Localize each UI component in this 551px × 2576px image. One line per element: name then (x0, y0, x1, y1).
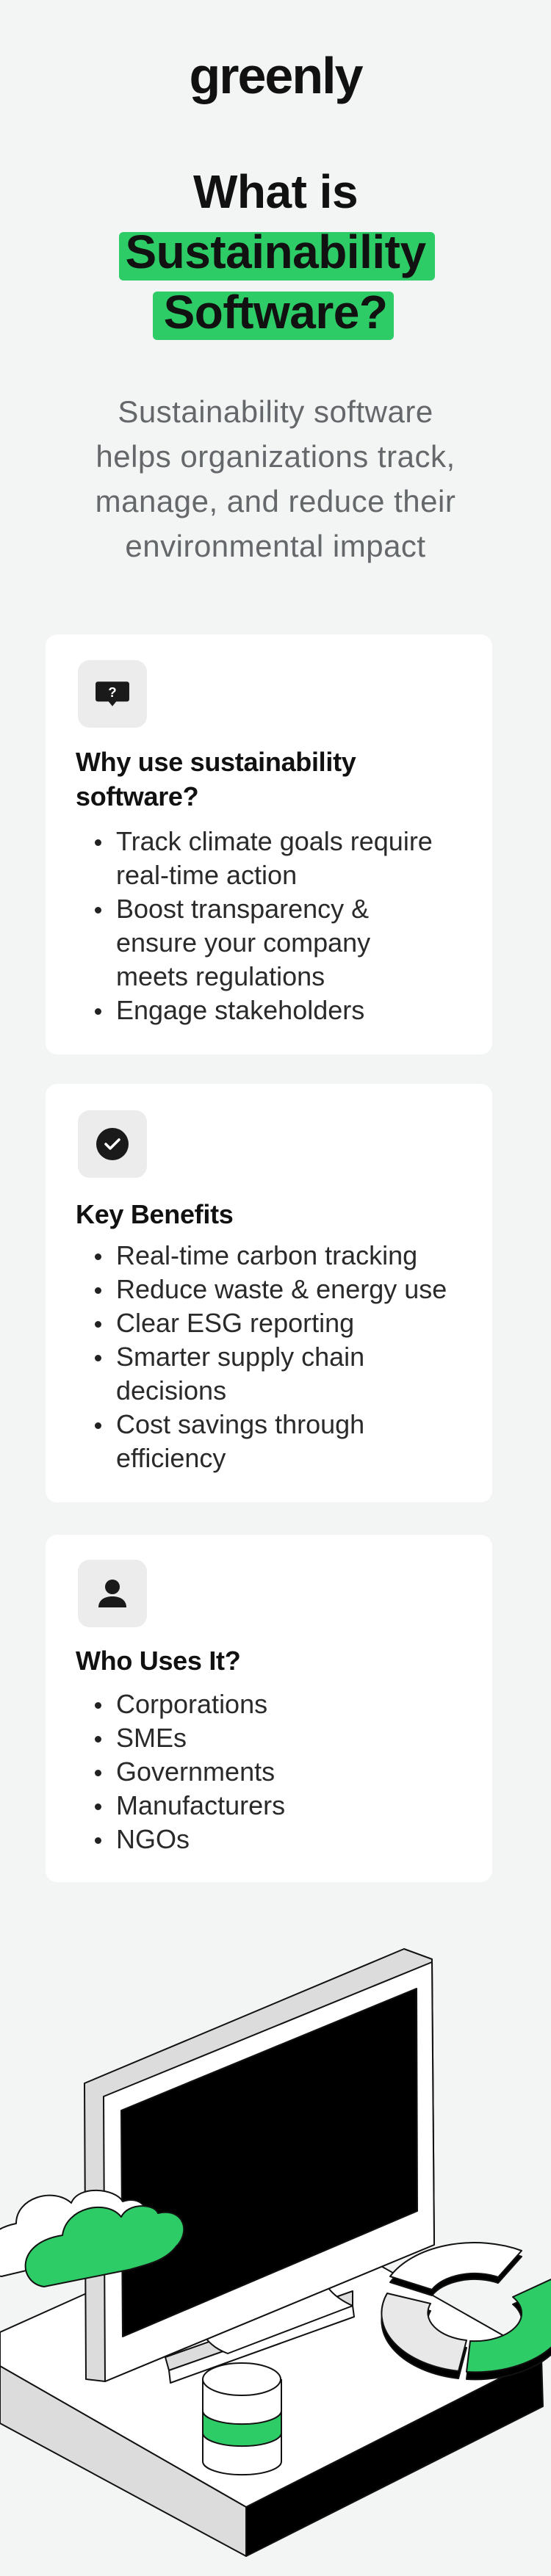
bullet list: Clear ESG reporting (116, 1308, 354, 1338)
bullet list: Boost transparency & (116, 894, 369, 924)
bullet list: Smarter supply chain (116, 1342, 364, 1372)
title (119, 165, 435, 340)
bullet list: Governments (116, 1756, 275, 1787)
panel: key benefits (46, 1084, 492, 1502)
title text: Software? (164, 286, 387, 339)
database (203, 2363, 281, 2475)
highlight 1 (119, 232, 435, 281)
monitor stand (165, 2262, 354, 2383)
panel: why use (46, 634, 492, 1054)
bullet list: Corporations (116, 1689, 267, 1719)
bullet list: Manufacturers (116, 1790, 285, 1820)
platform (0, 2207, 543, 2556)
bullet list: decisions (116, 1375, 226, 1405)
title text: What is (193, 165, 358, 218)
icon: check (78, 1110, 147, 1178)
bullet list: NGOs (116, 1824, 190, 1854)
bullet list: efficiency (116, 1443, 226, 1473)
logo: greenly (190, 47, 361, 104)
bullet list (95, 826, 433, 1025)
monitor (84, 1949, 434, 2381)
heading (76, 747, 356, 811)
bullet list: meets regulations (116, 961, 325, 991)
subtitle: helps organizations track, (96, 439, 455, 474)
heading: Key Benefits (76, 1199, 233, 1229)
bullet list: Real-time carbon tracking (116, 1240, 417, 1270)
title text: Sustainability (125, 225, 426, 278)
icon: question bubble (78, 660, 147, 728)
heading: Why use sustainability (76, 747, 356, 777)
subtitle: manage, and reduce their (96, 484, 455, 518)
icon: question bubble: ? (108, 684, 117, 700)
bullet list: real-time action (116, 860, 297, 890)
bullet list: Reduce waste & energy use (116, 1274, 447, 1304)
bullet list (95, 1689, 285, 1854)
heading: Who Uses It? (76, 1646, 240, 1676)
donut chart (381, 2243, 551, 2379)
panel: who uses it (46, 1535, 492, 1882)
title text (125, 165, 426, 339)
bullet list: Engage stakeholders (116, 995, 364, 1025)
subtitle: Sustainability software (118, 394, 433, 429)
cloud (0, 2190, 184, 2287)
illustration: computer on platform (0, 1948, 551, 2557)
bullet list: Track climate goals require (116, 826, 433, 856)
highlight 2 (153, 292, 394, 340)
bullet list (95, 1240, 447, 1473)
subtitle: environmental impact (125, 529, 426, 563)
heading: software? (76, 781, 198, 811)
subtitle (96, 394, 455, 563)
bullet list: SMEs (116, 1723, 187, 1753)
bullet list: ensure your company (116, 927, 370, 958)
bullet list: Cost savings through (116, 1409, 364, 1439)
icon: person (78, 1560, 147, 1627)
